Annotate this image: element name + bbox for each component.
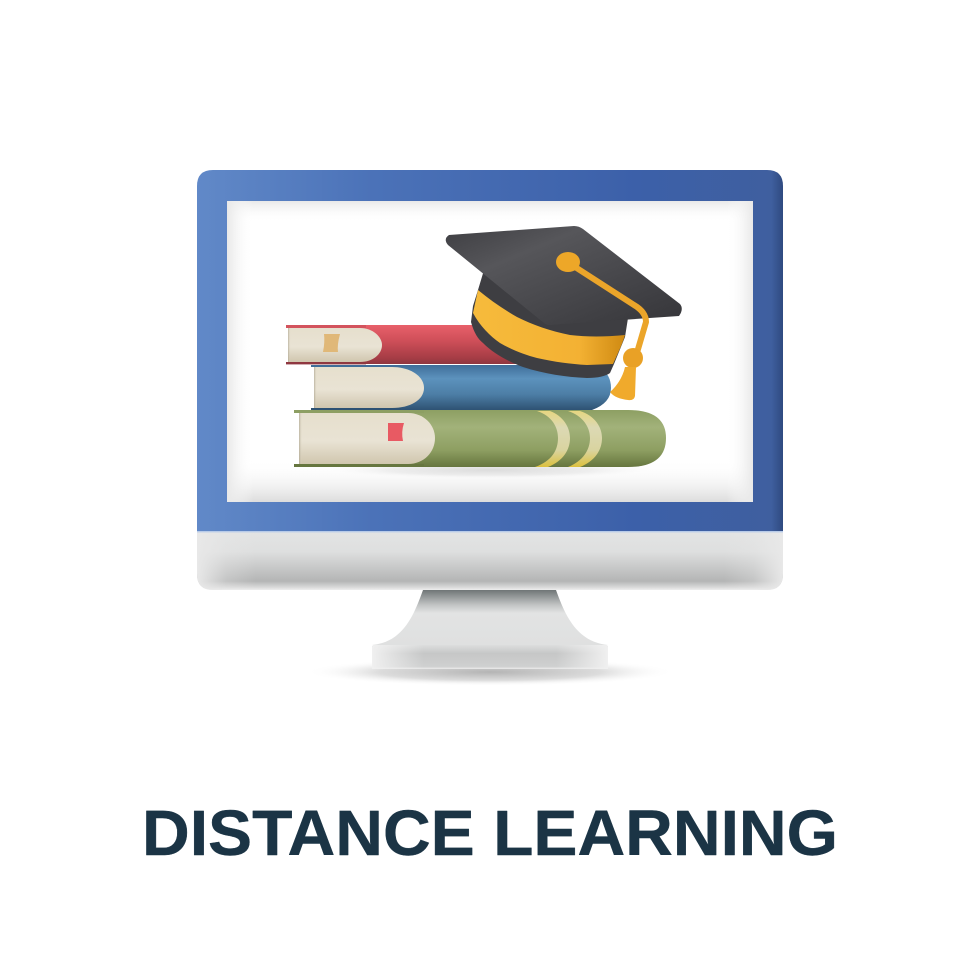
screen xyxy=(227,201,753,502)
books and graduation cap xyxy=(286,226,682,479)
title: DISTANCE LEARNING xyxy=(142,797,838,869)
stand shadow xyxy=(305,658,675,686)
tassel button xyxy=(556,252,580,272)
monitor bezel xyxy=(197,170,783,532)
stand neck xyxy=(372,590,608,645)
monitor chin xyxy=(197,531,783,590)
graduation cap xyxy=(446,226,682,400)
book shadow xyxy=(320,461,660,479)
book: green xyxy=(294,410,666,467)
cap gold band xyxy=(473,290,625,365)
tassel knot xyxy=(623,348,643,368)
tassel cord xyxy=(572,265,646,356)
tassel fringe xyxy=(610,367,636,400)
cap board xyxy=(446,226,682,325)
stand base xyxy=(372,645,608,669)
monitor xyxy=(197,170,783,686)
cap lower band and crown xyxy=(471,270,628,378)
book: blue xyxy=(311,365,611,410)
book: red xyxy=(286,325,530,364)
